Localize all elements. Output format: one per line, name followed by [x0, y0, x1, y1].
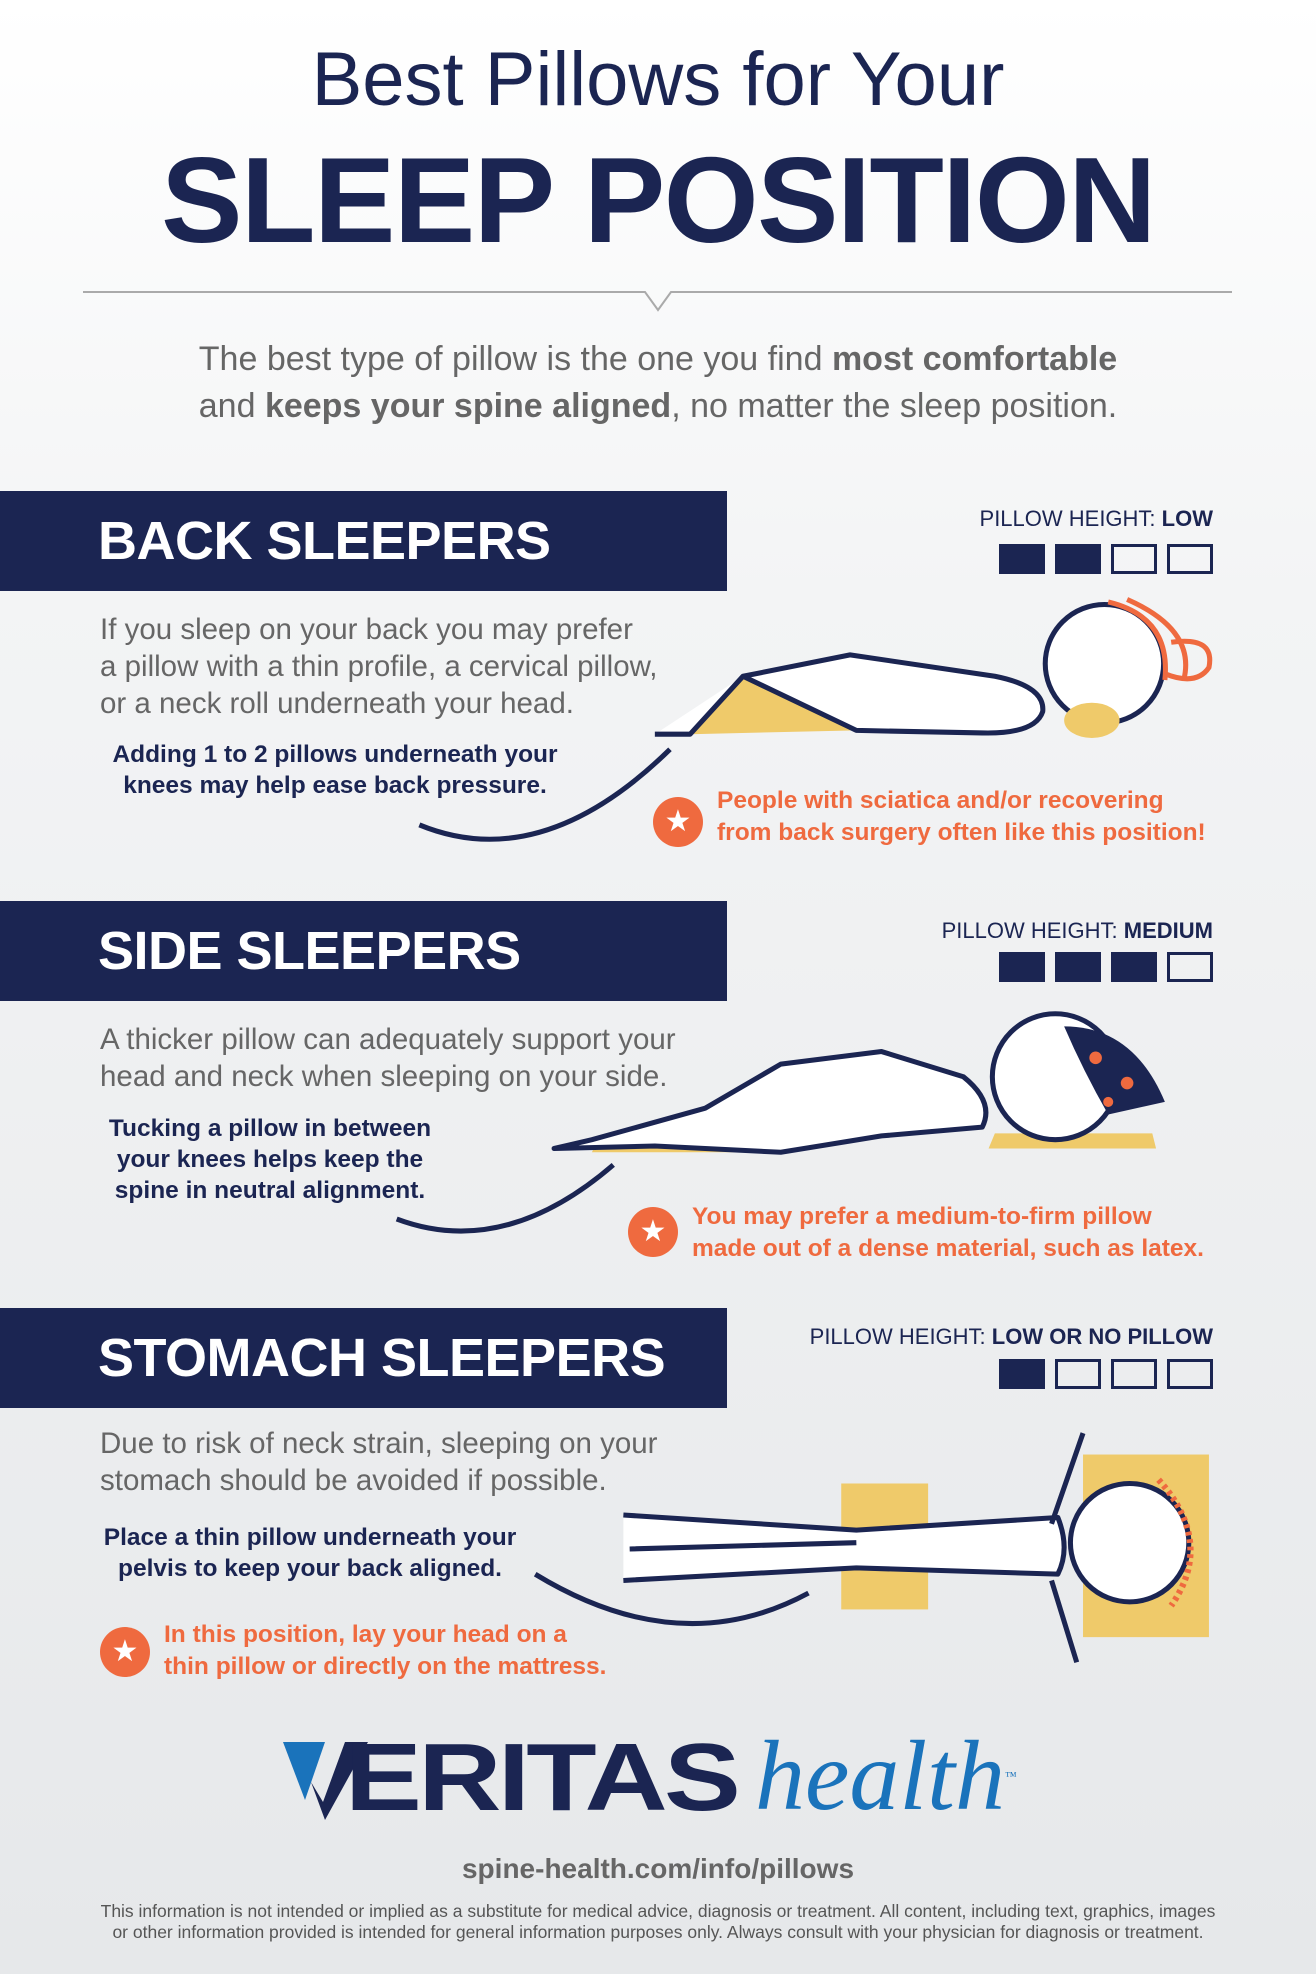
star icon: ★: [665, 805, 691, 838]
star icon: [100, 1627, 150, 1677]
pillow height label: PILLOW HEIGHT: MEDIUM: [942, 918, 1213, 943]
body text: Due to risk of neck strain, sleeping on your: [100, 1427, 658, 1460]
subtitle: [199, 340, 1117, 425]
orange callout: People with sciatica and/or recovering: [717, 787, 1164, 814]
body text: [100, 1023, 676, 1093]
bold tip: Tucking a pillow in between: [109, 1115, 431, 1142]
orange callout: In this position, lay your head on a: [164, 1621, 567, 1648]
body text: A thicker pillow can adequately support your: [100, 1023, 676, 1056]
disclaimer: This information is not intended or implied as a substitute for medical advice, diagnosis or treatment. All content, including text, graphics, images: [101, 1901, 1215, 1921]
stomach sleeper figure: [535, 1433, 1209, 1662]
star icon: ★: [112, 1635, 138, 1668]
orange callout: made out of a dense material, such as latex.: [692, 1235, 1204, 1262]
orange callout: [164, 1621, 606, 1680]
banner heading: STOMACH SLEEPERS: [98, 1328, 665, 1388]
body text: stomach should be avoided if possible.: [100, 1464, 607, 1497]
side sleeper figure: [397, 1014, 1165, 1231]
logo: health™: [755, 1720, 1017, 1831]
logo wordmark: ERITAS: [345, 1724, 737, 1831]
bold tip: pelvis to keep your back aligned.: [118, 1555, 502, 1582]
banner heading: [0, 491, 727, 591]
orange callout: You may prefer a medium-to-firm pillow: [692, 1203, 1152, 1230]
subtitle: The best type of pillow is the one you find most comfortable: [199, 340, 1117, 378]
bold tip: spine in neutral alignment.: [115, 1177, 425, 1204]
height boxes: [999, 952, 1213, 982]
divider with notch: [83, 291, 1232, 312]
body text: [100, 1427, 658, 1497]
star icon: ★: [640, 1215, 666, 1248]
bold tip: knees may help ease back pressure.: [123, 772, 547, 799]
title line 2: SLEEP POSITION: [161, 132, 1155, 268]
bold tip: [109, 1115, 431, 1204]
body text: or a neck roll underneath your head.: [100, 687, 574, 720]
url: spine-health.com/info/pillows: [462, 1853, 854, 1884]
logo: [283, 1720, 1017, 1831]
pillow height label: PILLOW HEIGHT: LOW: [980, 506, 1213, 531]
bold tip: your knees helps keep the: [117, 1146, 423, 1173]
subtitle: and keeps your spine aligned, no matter the sleep position.: [199, 387, 1117, 425]
title line 1: Best Pillows for Your: [312, 37, 1004, 122]
disclaimer: [101, 1901, 1215, 1942]
back sleeper figure: [419, 599, 1210, 839]
star icon: [628, 1207, 678, 1257]
orange callout: [692, 1203, 1204, 1262]
banner heading: BACK SLEEPERS: [98, 511, 551, 571]
panel: stomach sleepers: [0, 1308, 1213, 1680]
body text: head and neck when sleeping on your side.: [100, 1060, 667, 1093]
star icon: [653, 797, 703, 847]
panel: side sleepers: [0, 901, 1213, 1262]
banner heading: [0, 1308, 727, 1408]
bold tip: Place a thin pillow underneath your: [104, 1524, 516, 1551]
logo mark V: [283, 1742, 368, 1820]
banner heading: [0, 901, 727, 1001]
body text: [100, 613, 657, 720]
bold tip: Adding 1 to 2 pillows underneath your: [112, 741, 558, 768]
height boxes: [999, 544, 1213, 574]
banner heading: SIDE SLEEPERS: [98, 921, 521, 981]
disclaimer: or other information provided is intended for general information purposes only. Always consult with your physician for diagnosis or treatment.: [112, 1922, 1204, 1942]
orange callout: [717, 787, 1206, 846]
body text: If you sleep on your back you may prefer: [100, 613, 633, 646]
pillow height label: PILLOW HEIGHT: LOW OR NO PILLOW: [810, 1324, 1213, 1349]
bold tip: [104, 1524, 516, 1582]
orange callout: thin pillow or directly on the mattress.: [164, 1653, 606, 1680]
panel: back sleepers: [0, 491, 1213, 847]
height boxes: [999, 1359, 1213, 1389]
orange callout: from back surgery often like this position!: [717, 819, 1206, 846]
body text: a pillow with a thin profile, a cervical pillow,: [100, 650, 657, 683]
bold tip: [112, 741, 558, 799]
